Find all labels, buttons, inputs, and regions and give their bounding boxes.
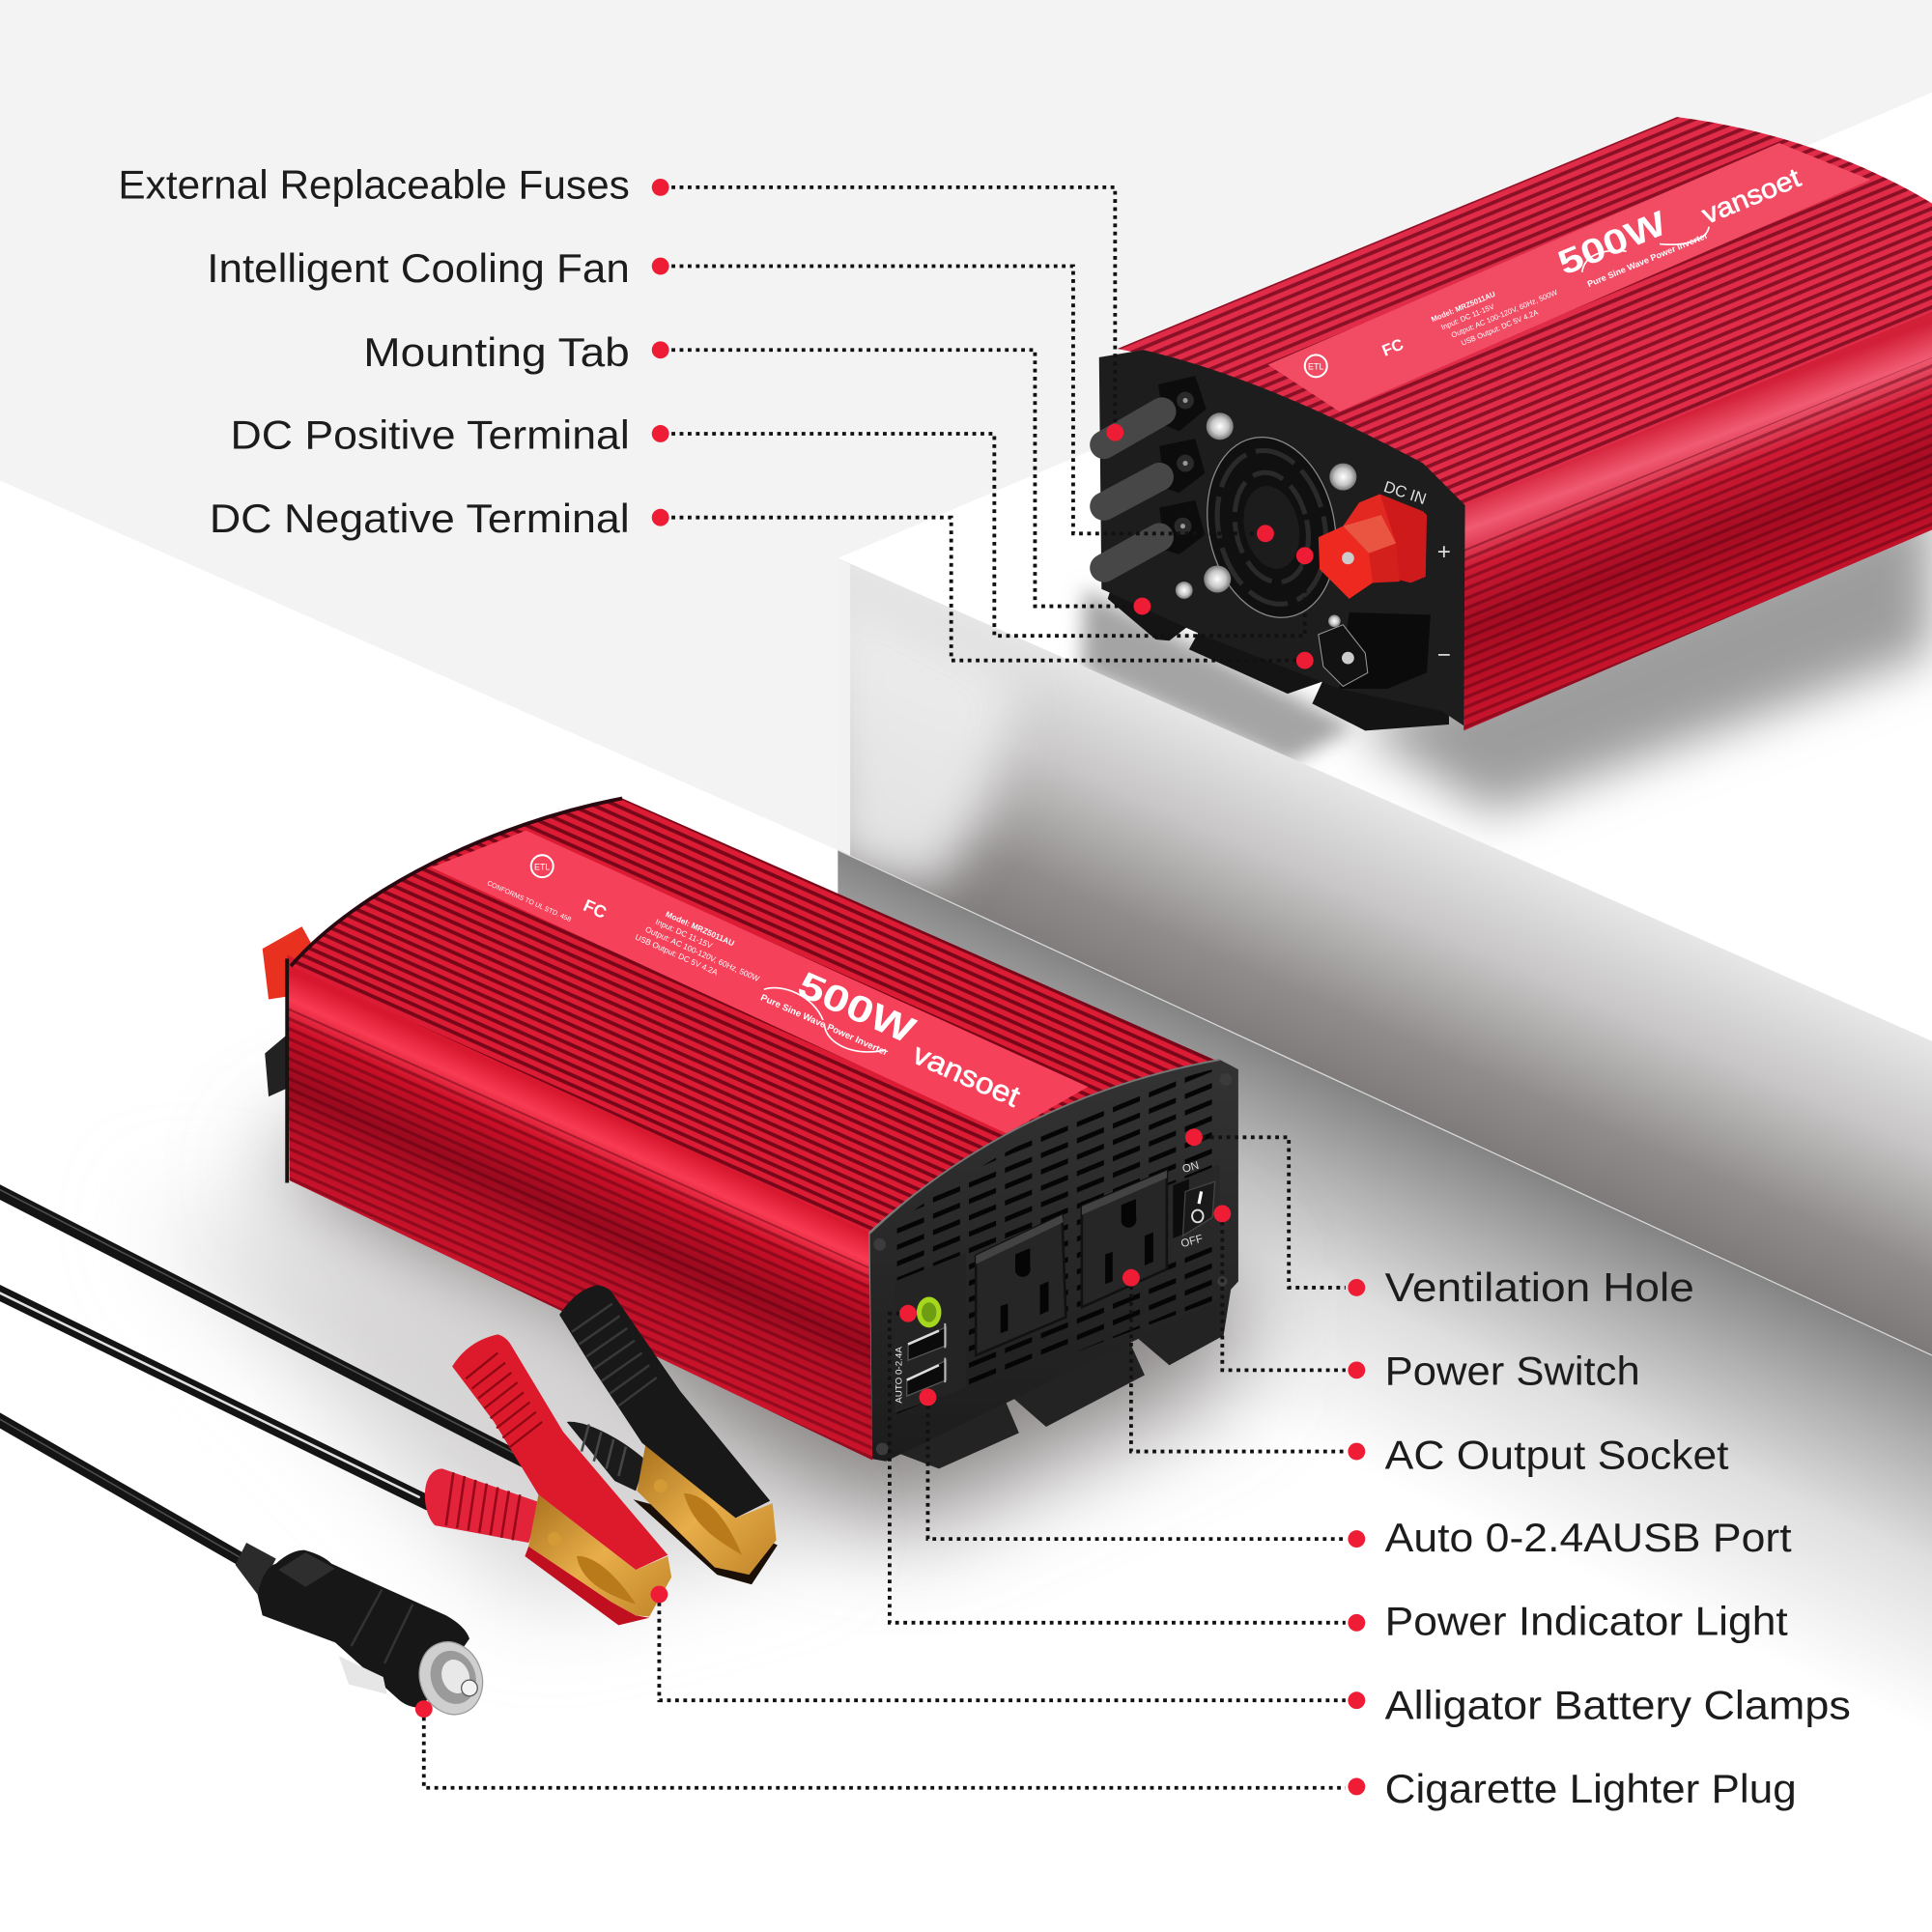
brand name: vansoet — [1697, 162, 1804, 230]
block base line — [838, 850, 1932, 1355]
minus sign: − — [1437, 642, 1451, 668]
screws — [873, 1073, 1233, 1455]
specifications: USB Output: DC 5V 4.2A — [634, 932, 720, 978]
specifications: Output: AC 100-120V, 60Hz, 500W — [644, 924, 761, 983]
label: negative terminal: DC Negative Terminal — [210, 496, 630, 541]
gold jaw — [528, 1494, 671, 1616]
cable: battery clamp red — [0, 1290, 429, 1503]
fuse holders — [1158, 376, 1207, 554]
side casing — [287, 955, 872, 1460]
certification mark: ETL — [1308, 362, 1323, 372]
rear panel — [1099, 350, 1465, 725]
label band — [1267, 143, 1870, 412]
block front face — [826, 558, 1932, 1355]
brand name: vansoet — [908, 1037, 1025, 1114]
specifications: Output: AC 100-120V, 60Hz, 500W — [1450, 288, 1559, 340]
front panel — [863, 1060, 1244, 1466]
subtitle swoosh — [764, 988, 886, 1052]
callout dots — [415, 179, 1365, 1795]
rear black terminal — [265, 1033, 296, 1096]
plus sign: + — [1437, 539, 1451, 565]
strain relief — [236, 1543, 276, 1595]
panel area around switch — [1168, 1164, 1220, 1257]
product subtitle: Pure Sine Wave Power Inverter — [1586, 230, 1710, 289]
certification mark — [531, 855, 554, 877]
AC socket left — [976, 1215, 1065, 1355]
grip behind — [567, 1422, 645, 1491]
certification mark: ETL — [534, 863, 550, 872]
handle — [559, 1285, 770, 1518]
label: fuses: External Replaceable Fuses — [118, 161, 630, 207]
cable: cigarette plug — [0, 1416, 246, 1562]
screws — [1176, 412, 1356, 627]
alligator clamp: red — [425, 1334, 671, 1625]
feet — [887, 1282, 1233, 1468]
mounting tabs — [1108, 579, 1449, 730]
FCC mark: FC — [581, 895, 610, 923]
lower jaw — [634, 1499, 778, 1584]
label band — [431, 831, 1088, 1133]
DC negative terminal — [1319, 612, 1431, 689]
label: tab: Mounting Tab — [363, 329, 630, 375]
ventilation holes — [896, 1069, 1211, 1414]
label: positive terminal: DC Positive Terminal — [231, 412, 630, 457]
power indicator LED — [917, 1296, 941, 1327]
label: clamps: Alligator Battery Clamps — [1385, 1682, 1851, 1727]
fuses — [1104, 376, 1207, 568]
specifications — [1430, 268, 1564, 355]
specifications: Model: MRZ5011AU — [1430, 290, 1497, 324]
rocker switch — [1173, 1160, 1215, 1250]
label: plug: Cigarette Lighter Plug — [1385, 1766, 1797, 1811]
DC IN label: DC IN — [1381, 477, 1429, 508]
label: fan: Intelligent Cooling Fan — [207, 245, 630, 291]
top casing — [1118, 117, 1932, 506]
collar seam — [352, 1589, 412, 1663]
certification mark — [1305, 355, 1327, 377]
lower jaw — [525, 1547, 649, 1625]
specifications: USB Output: DC 5V 4.2A — [1460, 307, 1540, 348]
product subtitle: Pure Sine Wave Power Inverter — [759, 992, 890, 1059]
wattage: 500W — [791, 964, 923, 1052]
compliance text: CONFORMS TO UL STD. 458 — [486, 880, 572, 923]
label: socket: AC Output Socket — [1385, 1432, 1729, 1477]
label: switch: Power Switch — [1385, 1349, 1640, 1394]
specifications: Input: DC 11-15V — [1440, 301, 1496, 331]
wattage: 500W — [1552, 204, 1672, 283]
specifications: Model: MRZ5011AU — [665, 909, 736, 948]
label: vent: Ventilation Hole — [1385, 1264, 1694, 1310]
AC socket right — [1082, 1171, 1167, 1307]
cigarette lighter plug — [236, 1543, 493, 1723]
upper inverter — [1099, 117, 1932, 730]
cables — [0, 1186, 529, 1562]
metal ring — [410, 1633, 493, 1723]
rocker switch: ON — [1181, 1160, 1201, 1176]
rocker switch: OFF — [1179, 1234, 1205, 1250]
top casing — [291, 799, 1220, 1233]
USB ports — [895, 1323, 947, 1404]
left callout labels — [118, 161, 630, 541]
callout leader lines — [424, 187, 1346, 1788]
DC positive terminal — [1319, 494, 1427, 599]
handle — [452, 1334, 668, 1570]
right callout labels — [1385, 1264, 1851, 1811]
contact tip — [462, 1680, 477, 1696]
alligator clamp: black — [559, 1285, 778, 1584]
label: indicator: Power Indicator Light — [1385, 1599, 1788, 1644]
subtitle swoosh — [1582, 227, 1709, 272]
USB ports: AUTO 0-2.4A — [895, 1347, 904, 1404]
cooling fan — [1191, 425, 1352, 630]
cable: battery clamp black — [0, 1186, 529, 1463]
lower inverter — [263, 799, 1244, 1468]
specifications: Input: DC 11-15V — [654, 917, 714, 951]
block top surface — [838, 93, 1932, 1041]
label: USB: Auto 0-2.4AUSB Port — [1385, 1515, 1792, 1560]
specifications — [634, 901, 770, 994]
grip texture — [278, 1552, 335, 1587]
side casing — [1462, 308, 1932, 730]
floor surface — [0, 481, 1932, 1932]
panel top rim — [870, 1060, 1220, 1234]
gold jaw — [637, 1444, 777, 1575]
side spring clip — [339, 1656, 387, 1694]
FCC mark: FC — [1379, 335, 1406, 360]
panel area around LED and USB — [895, 1253, 966, 1413]
second red grip — [425, 1468, 542, 1543]
rear red terminal — [263, 926, 314, 999]
plug body — [258, 1550, 469, 1708]
